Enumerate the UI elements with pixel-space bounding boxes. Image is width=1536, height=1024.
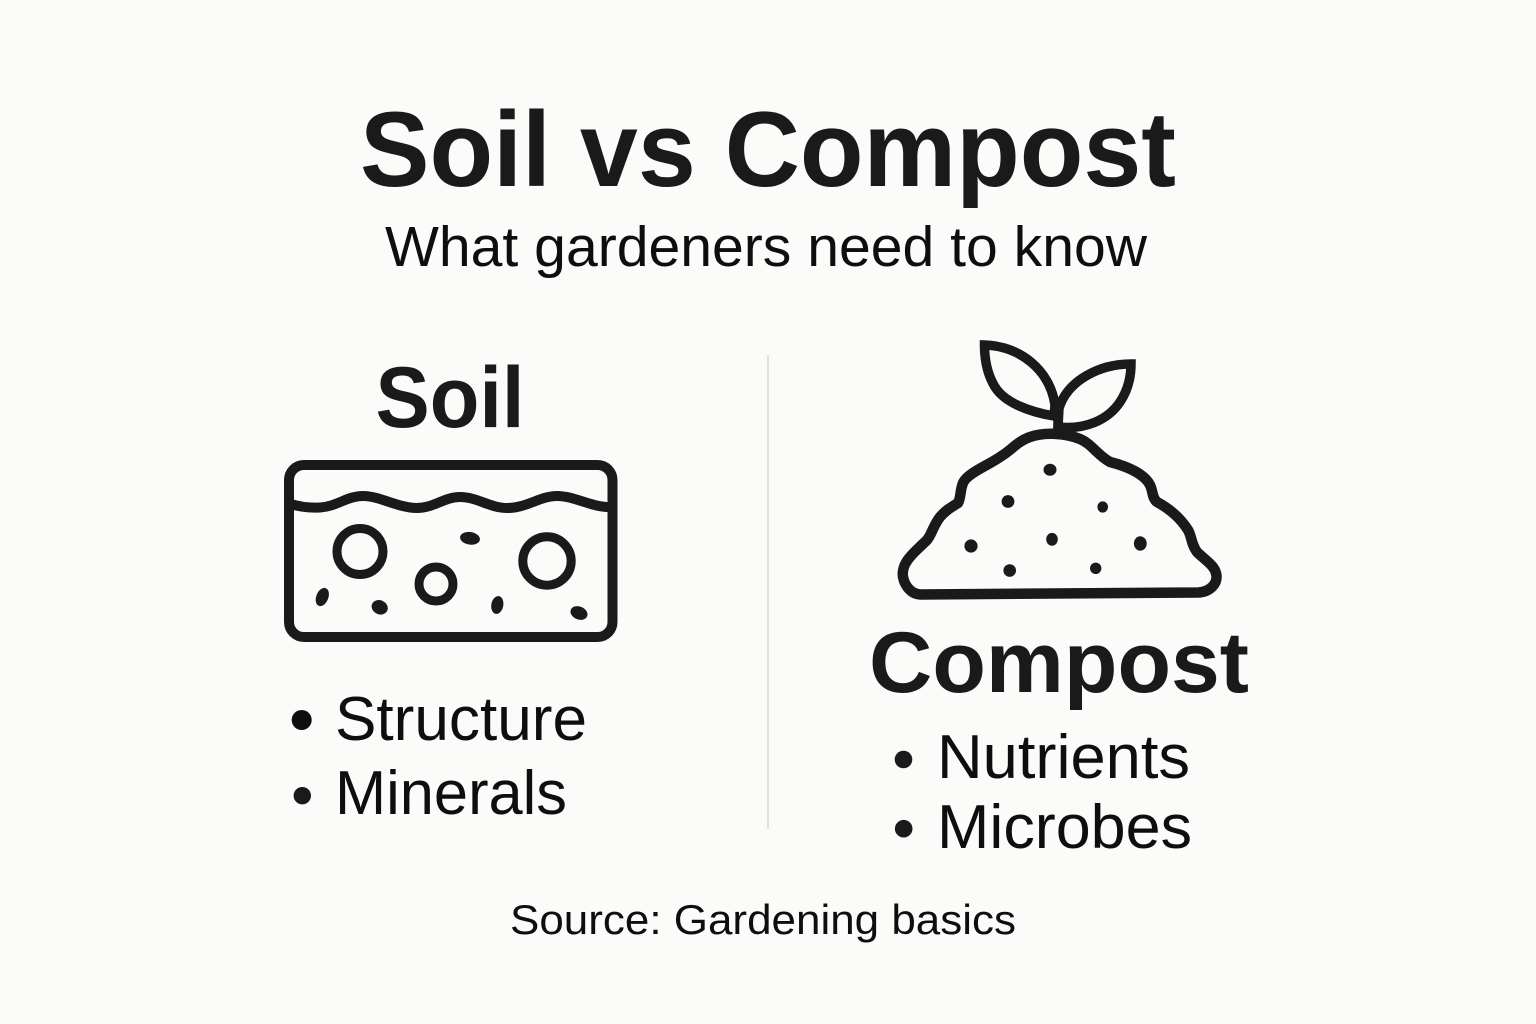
list: compost points [895,723,1192,862]
panel: soil [289,350,612,828]
heading: soil: Soil [376,350,524,446]
heading: compost: Compost [869,615,1249,711]
subtitle: What gardeners need to know [385,215,1148,279]
list: compost points: Nutrients [937,723,1190,792]
list: soil points [292,685,587,828]
list: compost points: Microbes [937,793,1192,862]
source note: Source: Gardening basics [510,896,1016,943]
icon: soil cross-section [289,465,612,637]
list: soil points: Structure [335,685,587,754]
list: soil points: Minerals [335,759,567,828]
title: Soil vs Compost [360,89,1176,209]
panel: compost [869,345,1249,862]
icon: compost pile with sprout [903,345,1217,594]
